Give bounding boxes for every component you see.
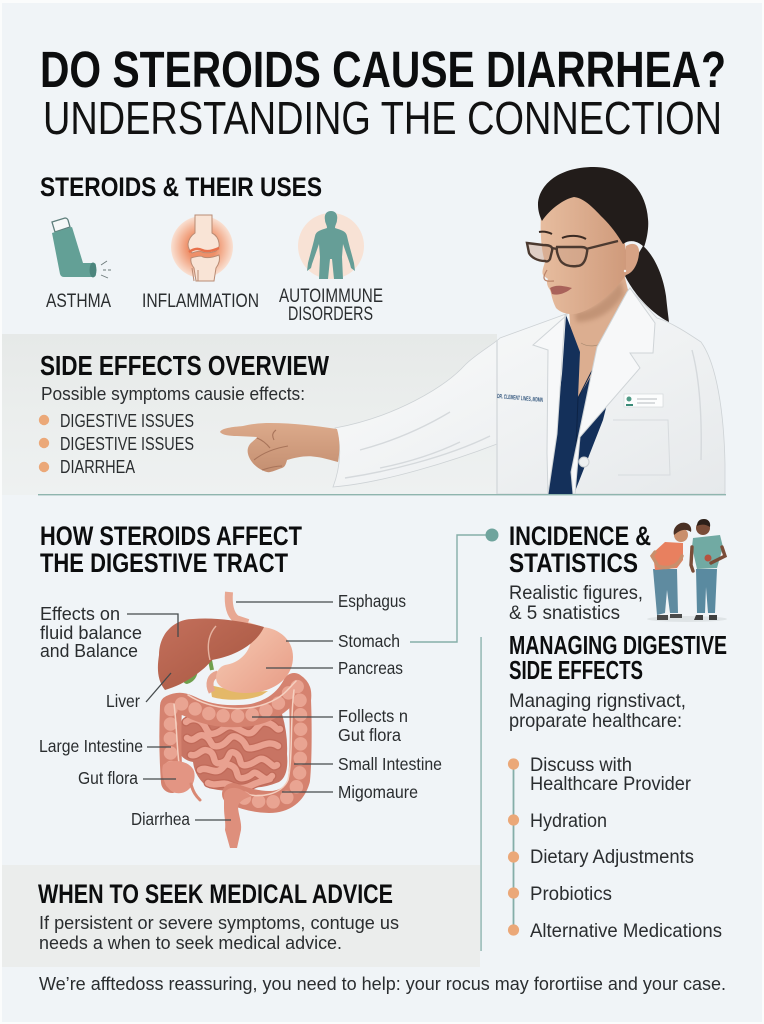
divider bbox=[38, 494, 726, 495]
heading: how steroids affect: HOW STEROIDS AFFECT bbox=[40, 521, 302, 551]
esophagus bbox=[229, 592, 248, 623]
callout: gut flora left: Gut flora bbox=[78, 768, 138, 788]
callout: diarrhea: Diarrhea bbox=[131, 809, 190, 829]
bullet list: side effects: DIGESTIVE ISSUES bbox=[60, 434, 194, 454]
bullet list: side effects: DIGESTIVE ISSUES bbox=[60, 411, 194, 431]
step: discuss with healthcare provider: Healthcare Provider bbox=[530, 774, 692, 795]
heading: steroids and their uses: STEROIDS & THEIR USES bbox=[40, 172, 322, 202]
text block: statistics bbox=[509, 582, 643, 624]
doctor face bbox=[541, 191, 626, 314]
panel: managing digestive side effects bbox=[508, 632, 727, 942]
callout: follects in gut flora: Gut flora bbox=[338, 725, 401, 745]
bullet list: side effects bbox=[39, 411, 194, 477]
text block: managing intro bbox=[509, 690, 686, 732]
bullet list: side effects: DIARRHEA bbox=[60, 457, 135, 477]
text block: advice: If persistent or severe symptoms, contuge us bbox=[39, 912, 399, 933]
panel: when to seek medical advice bbox=[2, 865, 480, 967]
callout: effects on fluid balance: Effects on bbox=[40, 603, 120, 624]
text block: statistics: & 5 snatistics bbox=[509, 602, 620, 624]
step: hydration: Hydration bbox=[530, 811, 607, 832]
callout: migomaure bbox=[282, 782, 418, 802]
doctor shirt bbox=[548, 292, 633, 494]
doctor hand bbox=[220, 423, 339, 472]
heading: managing digestive side effects bbox=[509, 632, 727, 685]
text block: statistics: Realistic figures, bbox=[509, 582, 643, 604]
left lapel bbox=[533, 315, 567, 494]
doctor brows and mouth bbox=[539, 232, 586, 239]
callout: follects in gut flora: Follects n bbox=[338, 706, 408, 726]
stomach bbox=[216, 622, 293, 693]
callout: effects on fluid balance: and Balance bbox=[40, 640, 138, 661]
connector: stomach to incidence bbox=[410, 528, 498, 642]
step: probiotics: Probiotics bbox=[530, 884, 612, 905]
doctor ponytail bbox=[625, 246, 669, 322]
callouts: organ labels bbox=[39, 591, 442, 829]
doctor neck bbox=[568, 274, 630, 400]
icon: human body bbox=[298, 211, 364, 279]
heading: incidence and statistics bbox=[509, 521, 651, 578]
doctor glasses bbox=[527, 241, 618, 266]
text block: advice bbox=[39, 912, 399, 953]
right lapel bbox=[571, 288, 655, 494]
step: alternative medications: Alternative Medications bbox=[530, 921, 722, 942]
illustration: two patients bbox=[647, 519, 727, 622]
icon: inflamed joint bbox=[171, 215, 233, 281]
panel: side effects background bbox=[2, 334, 497, 495]
pocket and button bbox=[613, 420, 670, 475]
heading: incidence and statistics: STATISTICS bbox=[509, 548, 638, 578]
callout: effects on fluid balance: fluid balance bbox=[40, 622, 142, 643]
callout: liver: Liver bbox=[106, 691, 140, 711]
heading: side effects overview: SIDE EFFECTS OVERVIEW bbox=[40, 350, 329, 381]
text block: symptoms intro: Possible symptoms causie effects: bbox=[41, 383, 305, 404]
callout: diarrhea bbox=[131, 809, 231, 829]
man patient bbox=[691, 519, 725, 620]
callout: small intestine: Small Intestine bbox=[338, 754, 442, 774]
step: discuss with healthcare provider: Discuss with bbox=[530, 755, 632, 776]
callout: effects on fluid balance bbox=[40, 603, 178, 661]
panel: steroids and their uses bbox=[40, 172, 383, 325]
coat name embroidery: DR. CLEMENT LINES, MDMN bbox=[497, 393, 544, 404]
heading: managing digestive side effects: SIDE EFFECTS bbox=[509, 657, 643, 685]
gallbladder bbox=[183, 668, 198, 684]
heading: how steroids affect: THE DIGESTIVE TRACT bbox=[40, 548, 288, 578]
icon: inhaler bbox=[52, 218, 111, 278]
callout: migomaure: Migomaure bbox=[338, 782, 418, 802]
timeline: management steps bbox=[508, 755, 722, 942]
label: autoimmune disorders bbox=[279, 286, 383, 325]
doctor coat bbox=[333, 289, 725, 494]
woman patient bbox=[652, 523, 691, 620]
callout: liver bbox=[106, 673, 171, 711]
label: inflammation: INFLAMMATION bbox=[142, 291, 259, 312]
panel: side effects overview bbox=[39, 350, 329, 477]
callout: follects in gut flora bbox=[252, 706, 408, 745]
callout: esophagus: Esphagus bbox=[338, 591, 406, 611]
text block: managing intro: Managing rignstivact, bbox=[509, 690, 686, 712]
step: discuss with healthcare provider bbox=[508, 755, 692, 795]
doctor ear bbox=[626, 244, 639, 275]
illustration: digestive system bbox=[158, 592, 301, 848]
callout: large intestine: Large Intestine bbox=[39, 736, 143, 756]
panel: incidence and statistics bbox=[509, 519, 727, 624]
callout: gut flora left bbox=[78, 768, 176, 788]
callout: stomach: Stomach bbox=[338, 631, 400, 651]
doctor hair bbox=[538, 167, 648, 247]
heading: when to seek medical advice: WHEN TO SEEK MEDICAL ADVICE bbox=[38, 879, 393, 909]
small intestine bbox=[174, 714, 287, 791]
large intestine bbox=[170, 681, 301, 802]
pancreas bbox=[210, 685, 268, 700]
liver bbox=[158, 618, 264, 690]
callout: pancreas bbox=[266, 658, 403, 678]
callout: pancreas: Pancreas bbox=[338, 658, 403, 678]
callout: stomach bbox=[286, 631, 400, 651]
heading: how steroids affect bbox=[40, 521, 302, 578]
label: autoimmune disorders: DISORDERS bbox=[288, 304, 373, 325]
heading: incidence and statistics: INCIDENCE & bbox=[509, 521, 651, 551]
text block: advice: needs a when to seek medical advice. bbox=[39, 932, 342, 953]
text block: managing intro: proparate healthcare: bbox=[509, 710, 682, 732]
duodenum bbox=[210, 674, 218, 692]
step: dietary adjustments: Dietary Adjustments bbox=[530, 847, 694, 868]
title bbox=[40, 41, 726, 144]
panel: how steroids affect the digestive tract bbox=[39, 521, 442, 848]
label: autoimmune disorders: AUTOIMMUNE bbox=[279, 286, 383, 307]
coat sleeve folds bbox=[345, 340, 701, 494]
label: asthma: ASTHMA bbox=[46, 291, 111, 312]
divider: right column rule bbox=[480, 637, 482, 951]
name badge bbox=[624, 394, 663, 407]
illustration: doctor pointing bbox=[220, 167, 725, 494]
footer text: We’re afftedoss reassuring, you need to help: your rocus may forortiise and your case. bbox=[39, 973, 726, 994]
cecum and appendix bbox=[162, 761, 195, 793]
rectum bbox=[224, 788, 252, 848]
